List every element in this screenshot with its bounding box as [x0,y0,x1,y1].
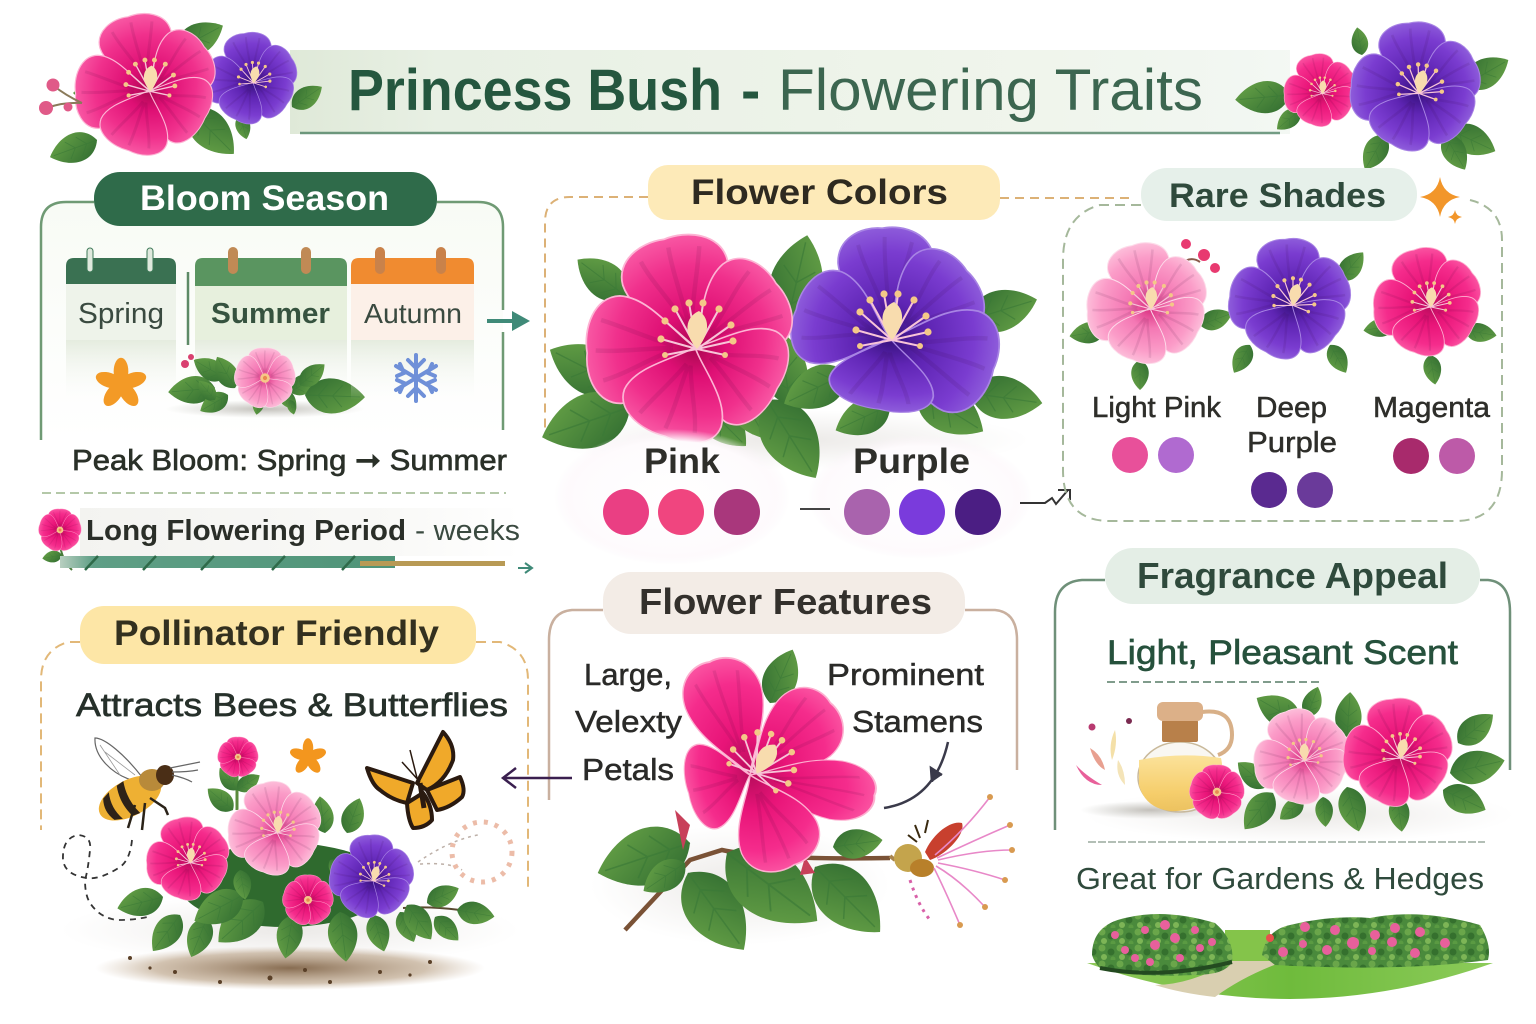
panel: rare shades [1063,168,1502,521]
stamens label: Prominent [827,657,984,692]
long flowering period: - weeks [415,515,520,547]
garden hedges scene [1087,914,1493,999]
panel: pollinator friendly [41,606,528,990]
stamens label: Stamens [852,704,983,739]
petals label: Velexty [575,704,683,739]
header flowers left [39,7,328,171]
petals label: Large, [584,657,672,692]
stamen detail [890,794,1015,928]
arrow: features to pollinator [503,768,572,788]
long flowering period: Long Flowering Period [86,515,406,547]
title: - [741,58,760,123]
flower colors heading [648,165,1000,220]
gardens text: Great for Gardens & Hedges [1076,861,1484,896]
long flowering period [36,508,532,573]
scent dots [418,822,512,882]
flower features heading [603,572,965,634]
calendar: summer [165,247,366,419]
pink label and swatches: Pink [644,442,721,481]
perfume bottle [1076,702,1232,819]
icon: bee [92,738,200,830]
calendar: spring: Spring [78,298,164,330]
pink and purple flowers [533,224,1045,492]
pollinator heading [80,606,476,664]
purple label and swatches: Purple [853,442,970,481]
icon: sparkle [1420,177,1462,224]
fragrance heading: Fragrance Appeal [1137,555,1448,596]
calendar: autumn [351,247,474,401]
panel: flower features [503,572,1017,966]
icon: orange leaf [94,358,148,410]
title: Flowering Traits [778,58,1203,123]
pink label and swatches [603,442,760,535]
flower colors heading: Flower Colors [691,173,948,212]
rare shades heading [1141,168,1417,221]
calendar: autumn: Autumn [364,298,462,329]
deep purple flower [1218,223,1371,508]
calendar: summer: Summer [211,298,330,330]
panel: flower colors [533,165,1130,565]
bloom season heading [94,172,437,226]
rare shades heading: Rare Shades [1169,177,1386,215]
calendar: spring [66,248,176,410]
title: Princess Bush [348,58,722,123]
magenta label: Magenta [1373,392,1491,424]
fragrance flowers [1085,684,1515,843]
icon: small orange star [289,738,327,775]
bloom season heading: Bloom Season [140,179,389,218]
panel: bloom season [36,172,532,573]
header band and title [290,50,1290,134]
petals label: Petals [582,752,674,787]
curved arrow to flower [884,742,948,808]
summer flower sprig [165,348,366,419]
dashed flight path [63,835,147,920]
arrow: colors to rare shades [1020,490,1070,504]
panel: fragrance appeal [1055,548,1515,999]
attracts text: Attracts Bees & Butterflies [76,687,508,723]
header flowers right [1234,7,1516,175]
peak bloom text: Peak Bloom: Spring ➞ Summer [72,445,507,477]
deep purple label: Deep [1256,392,1327,424]
deep purple label: Purple [1247,427,1337,459]
magenta flower [1362,242,1498,474]
icon: butterfly [367,732,464,828]
pollinator heading: Pollinator Friendly [114,614,440,653]
purple label and swatches [844,442,1001,535]
light pink flower [1068,237,1235,473]
fragrance heading [1105,548,1480,604]
arrow: bloom to colors [487,311,530,331]
flower features heading: Flower Features [639,581,932,622]
icon: snowflake [396,355,436,401]
large flower with branch [589,643,1015,966]
flowering bush [60,737,520,990]
light pink label: Light Pink [1092,392,1222,424]
scent subtitle: Light, Pleasant Scent [1107,634,1459,672]
